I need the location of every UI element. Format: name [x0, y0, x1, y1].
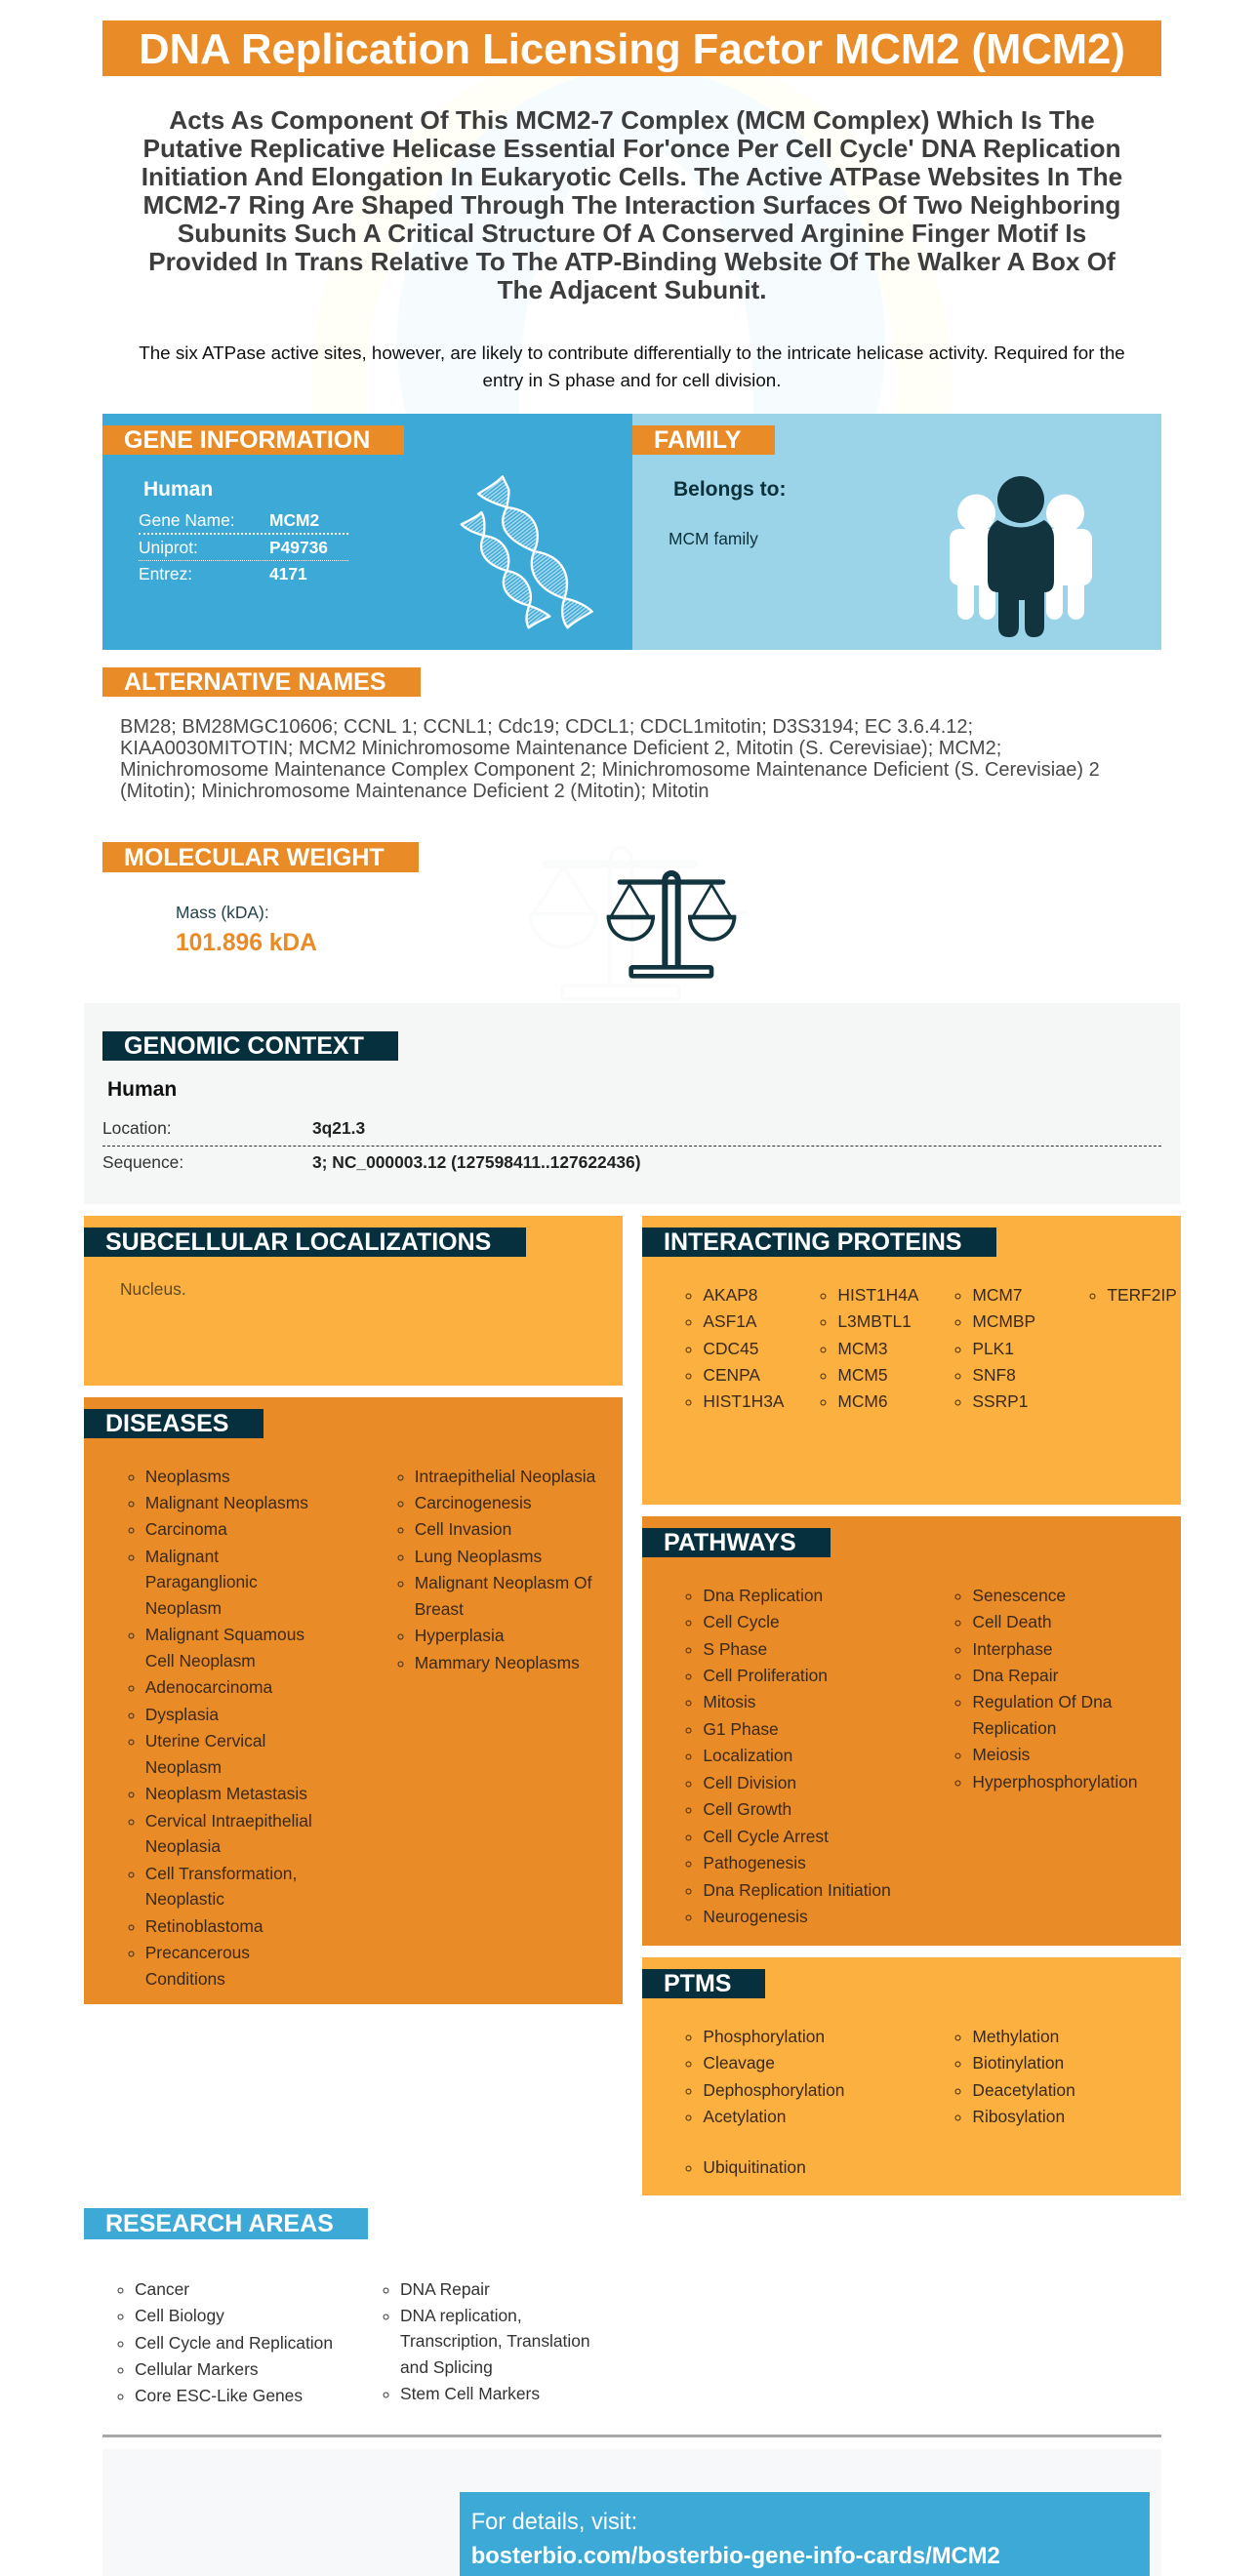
text: alternative names list: BM28; BM28MGC10606; CCNL 1; CCNL1; Cdc19; CDCL1; CDCL1mitotin; D3S3194; EC 3.6.4.12; [120, 716, 973, 738]
text: alternative names list: KIAA0030MITOTIN; MCM2 Minichromosome Maintenance Deficient 2, Mitotin (S. Cerevisiae); MCM2; [120, 738, 1001, 759]
panel: gene information [102, 414, 632, 650]
list: pathways column 1: Localization [703, 1746, 792, 1765]
list: proteins column 1: CDC45 [703, 1339, 758, 1358]
summary heading text: Initiation And Elongation In Eukaryotic Cells. The Active ATPase Websites In The [142, 162, 1122, 191]
list: proteins column 2: L3MBTL1 [837, 1311, 912, 1331]
list: proteins column 2: MCM6 [837, 1391, 888, 1411]
list: pathways column 1: S Phase [703, 1639, 767, 1659]
text: nucleus: Nucleus. [120, 1279, 186, 1299]
panel: pathways [642, 1516, 1181, 1946]
heading: molecular weight: MOLECULAR WEIGHT [124, 844, 385, 871]
panel: interacting proteins [642, 1216, 1181, 1505]
summary heading text: The Adjacent Subunit. [497, 275, 767, 304]
list: diseases column 1: Carcinoma [145, 1519, 227, 1539]
list: pathways column 2: Dna Repair [972, 1666, 1058, 1685]
row: sequence: 3; NC_000003.12 (127598411..127622436) [312, 1152, 641, 1172]
list: ptms column 1: Acetylation [703, 2107, 786, 2126]
list: diseases column 1: Cell Transformation, [145, 1864, 297, 1883]
list: proteins column 1 [685, 1285, 785, 1411]
text: url: bosterbio.com/bosterbio-gene-info-cards/MCM2 [471, 2543, 1000, 2569]
list: pathways column 2: Interphase [972, 1639, 1053, 1659]
list: ptms column 2: Biotinylation [972, 2053, 1064, 2073]
row: entrez [139, 564, 307, 584]
list: pathways column 1: Cell Proliferation [703, 1666, 828, 1685]
list: diseases column 1: Precancerous [145, 1943, 250, 1962]
row: entrez: 4171 [269, 564, 307, 584]
list: diseases column 1: Neoplasm [145, 1757, 222, 1777]
list: pathways column 1: Cell Cycle Arrest [703, 1827, 829, 1846]
row: uniprot: Uniprot: [139, 538, 198, 557]
text: alternative names list: (Mitotin); Minichromosome Maintenance Deficient 2 (Mitotin); Mitotin [120, 781, 710, 802]
list: proteins column 3: PLK1 [972, 1339, 1014, 1358]
list: ptms column 2: Methylation [972, 2027, 1059, 2046]
panel: genomic context [84, 1003, 1180, 1204]
heading: family [632, 425, 775, 455]
list: pathways column 1 [685, 1586, 891, 1926]
list: pathways column 2: Replication [972, 1718, 1056, 1738]
list: proteins column 1: CENPA [703, 1365, 760, 1385]
list: research areas column 1: Cancer [135, 2279, 189, 2299]
label: mass: Mass (kDA): [176, 903, 269, 922]
summary heading text: Subunits Such A Critical Structure Of A Conserved Arginine Finger Motif Is [178, 219, 1086, 248]
description text: entry in S phase and for cell division. [483, 370, 781, 390]
list: ptms column 2 [954, 2027, 1075, 2126]
list: pathways column 2: Senescence [972, 1586, 1066, 1605]
row: gene name [139, 510, 319, 530]
heading: alternative names: ALTERNATIVE NAMES [124, 668, 386, 696]
list: ptms column 2: Ribosylation [972, 2107, 1065, 2126]
list: proteins column 2: HIST1H4A [837, 1285, 919, 1305]
list: pathways column 1: Cell Division [703, 1773, 796, 1792]
heading: interacting proteins: INTERACTING PROTEINS [664, 1228, 962, 1256]
list: diseases column 1: Malignant Squamous [145, 1625, 304, 1644]
list: diseases column 2: Hyperplasia [415, 1626, 505, 1645]
list: pathways column 1: Dna Replication Initiation [703, 1879, 891, 1899]
summary heading text: Provided In Trans Relative To The ATP-Binding Website Of The Walker A Box Of [148, 246, 1115, 275]
heading: ptms [642, 1969, 765, 1998]
row: uniprot: P49736 [269, 538, 328, 557]
list: pathways column 1: Neurogenesis [703, 1907, 808, 1926]
list: proteins column 1: AKAP8 [703, 1285, 757, 1305]
list: diseases column 1: Paraganglionic [145, 1572, 258, 1591]
list: research areas column 1: Cellular Markers [135, 2359, 259, 2379]
section: molecular weight [102, 842, 736, 979]
icon: people [950, 476, 1092, 637]
description text: The six ATPase active sites, however, are likely to contribute differentially to the intricate helicase activity. Required for the [139, 342, 1125, 363]
list: ptms column 1: Dephosphorylation [703, 2080, 844, 2100]
heading: pathways [642, 1528, 831, 1557]
heading: gene information: GENE INFORMATION [124, 426, 370, 454]
list: diseases column 1: Conditions [145, 1969, 225, 1989]
list: pathways column 1: Pathogenesis [703, 1853, 806, 1872]
list: diseases column 2: Carcinogenesis [415, 1493, 532, 1512]
summary heading text: MCM2-7 Ring Are Shaped Through The Interaction Surfaces Of Two Neighboring [143, 189, 1120, 219]
row: entrez: Entrez: [139, 564, 192, 584]
list: diseases column 1: Retinoblastoma [145, 1916, 264, 1936]
heading: genomic context: GENOMIC CONTEXT [124, 1032, 364, 1060]
list: diseases column 1: Neoplastic [145, 1889, 224, 1909]
row: sequence: Sequence: [102, 1152, 183, 1172]
row: sequence [102, 1152, 641, 1172]
panel: diseases [84, 1397, 623, 2004]
list: proteins column 4: TERF2IP [1107, 1285, 1177, 1305]
list: proteins column 2: MCM5 [837, 1365, 888, 1385]
list: pathways column 2: Meiosis [972, 1745, 1030, 1764]
list: research areas column 2 [383, 2279, 590, 2403]
list: pathways column 1: G1 Phase [703, 1719, 779, 1739]
summary heading text: Acts As Component Of This MCM2-7 Complex (MCM Complex) Which Is The [169, 105, 1095, 135]
text: alternative names list: Minichromosome Maintenance Complex Component 2; Minichromosome Maintenance Deficient (S. Cerevisiae) 2 [120, 759, 1100, 781]
list: proteins column 2: MCM3 [837, 1339, 888, 1358]
panel: ptms [642, 1957, 1181, 2195]
list: pathways column 1: Mitosis [703, 1692, 755, 1711]
list: diseases column 2: Mammary Neoplasms [415, 1653, 580, 1672]
list: diseases column 1: Neoplasia [145, 1836, 221, 1856]
text: family name: MCM family [669, 529, 758, 548]
list: research areas column 1: Cell Cycle and Replication [135, 2333, 333, 2353]
label: human: Human [143, 478, 213, 501]
list: pathways column 2 [954, 1586, 1138, 1791]
list: ptms column 2: Deacetylation [972, 2080, 1075, 2100]
row: uniprot [139, 538, 328, 557]
section: research areas [84, 2208, 590, 2405]
list: research areas column 1: Cell Biology [135, 2306, 224, 2325]
list: diseases column 2: Lung Neoplasms [415, 1547, 542, 1566]
list: ptms column 1: Phosphorylation [703, 2027, 825, 2046]
list: diseases column 2: Breast [415, 1599, 464, 1619]
list: research areas column 1 [117, 2279, 333, 2405]
panel: family [632, 414, 1161, 650]
list: proteins column 3: MCMBP [972, 1311, 1035, 1331]
row: gene name: MCM2 [269, 510, 319, 530]
list: diseases column 1: Neoplasm [145, 1598, 222, 1618]
row: location: 3q21.3 [312, 1118, 365, 1138]
list: pathways column 1: Cell Growth [703, 1799, 791, 1819]
list: research areas column 1: Core ESC-Like Genes [135, 2386, 303, 2405]
list: research areas column 2: DNA Repair [400, 2279, 490, 2299]
heading: research areas: RESEARCH AREAS [105, 2210, 334, 2237]
watermark logo [397, 76, 885, 414]
list: pathways column 1: Dna Replication [703, 1586, 823, 1605]
icon: dna helix [461, 475, 593, 629]
list: pathways column 2: Cell Death [972, 1612, 1052, 1631]
list: diseases column 1: Cervical Intraepithelial [145, 1811, 312, 1831]
list: diseases column 1: Malignant Neoplasms [145, 1493, 308, 1512]
heading: diseases: DISEASES [105, 1410, 228, 1437]
value: mass: 101.896 kDA [176, 930, 317, 956]
list: proteins column 3: SSRP1 [972, 1391, 1028, 1411]
callout: details link [460, 2492, 1150, 2576]
panel: subcellular localizations [84, 1216, 623, 1386]
list: diseases column 1: Malignant [145, 1547, 219, 1566]
heading: diseases [84, 1409, 264, 1438]
list: diseases column 2 [398, 1466, 595, 1672]
description text [139, 342, 1125, 390]
list: ptms column 1: Cleavage [703, 2053, 775, 2073]
list: pathways column 1: Cell Cycle [703, 1612, 780, 1631]
heading: ptms: PTMS [664, 1970, 731, 1997]
summary heading text: Putative Replicative Helicase Essential For'once Per Cell Cycle' DNA Replication [142, 133, 1121, 162]
list: diseases column 1: Dysplasia [145, 1705, 219, 1724]
title: DNA Replication Licensing Factor MCM2 (MCM2) [139, 26, 1125, 73]
list: diseases column 1: Cell Neoplasm [145, 1651, 256, 1670]
panel: footer [102, 2449, 1161, 2576]
label: human: Human [107, 1078, 177, 1101]
list: research areas column 2: and Splicing [400, 2357, 493, 2377]
row: location: Location: [102, 1118, 172, 1138]
list: diseases column 1 [129, 1466, 312, 1989]
list: research areas column 2: Transcription, Translation [400, 2331, 590, 2351]
list: diseases column 2: Cell Invasion [415, 1519, 511, 1539]
label: belongs to: Belongs to: [673, 478, 787, 501]
row: gene name: Gene Name: [139, 510, 235, 530]
list: proteins column 1: HIST1H3A [703, 1391, 785, 1411]
summary heading text [142, 105, 1122, 304]
list: proteins column 3 [954, 1285, 1035, 1411]
list: diseases column 1: Neoplasm Metastasis [145, 1784, 307, 1803]
list: ptms column 1: Ubiquitination [703, 2157, 806, 2177]
list: ptms column 1 [685, 2027, 844, 2177]
list: diseases column 1: Adenocarcinoma [145, 1677, 272, 1697]
list: diseases column 2: Intraepithelial Neoplasia [415, 1466, 595, 1485]
text: alternative names list [120, 716, 1100, 802]
row: location [102, 1118, 365, 1138]
list: proteins column 1: ASF1A [703, 1311, 756, 1331]
text: for details: For details, visit: [471, 2510, 637, 2535]
list: diseases column 1: Neoplasms [145, 1466, 230, 1485]
list: proteins column 3: MCM7 [972, 1285, 1023, 1305]
list: diseases column 2: Malignant Neoplasm Of [415, 1573, 591, 1592]
list: research areas column 2: DNA replication, [400, 2306, 522, 2325]
heading: family: FAMILY [654, 426, 741, 454]
list: research areas column 2: Stem Cell Markers [400, 2384, 540, 2403]
icon: balance scale [607, 870, 736, 979]
list: proteins column 2 [820, 1285, 919, 1411]
list: pathways column 2: Regulation Of Dna [972, 1692, 1112, 1711]
list: proteins column 3: SNF8 [972, 1365, 1016, 1385]
heading: pathways: PATHWAYS [664, 1529, 796, 1556]
list: pathways column 2: Hyperphosphorylation [972, 1772, 1138, 1791]
heading: subcellular localizations: SUBCELLULAR LOCALIZATIONS [105, 1228, 491, 1256]
section: alternative names [102, 667, 1100, 802]
list: diseases column 1: Uterine Cervical [145, 1731, 265, 1751]
